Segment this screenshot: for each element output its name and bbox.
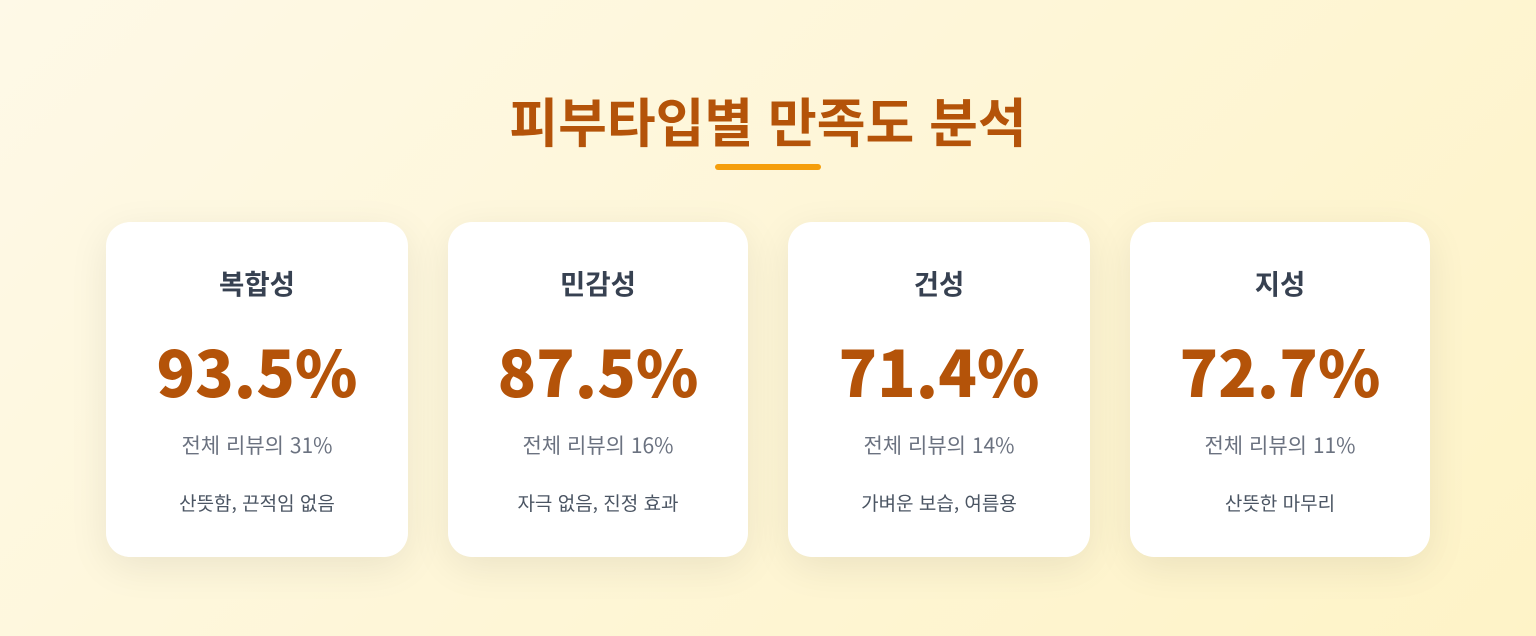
keywords: 산뜻한 마무리 xyxy=(1225,489,1335,516)
keywords: 산뜻함, 끈적임 없음 xyxy=(179,489,335,516)
panel: 건성 card xyxy=(788,222,1090,557)
skin type name: 복합성 xyxy=(219,262,295,302)
title underline xyxy=(715,164,821,170)
satisfaction percentage: 71.4% xyxy=(838,324,1040,416)
panel: 민감성 card xyxy=(448,222,748,557)
review share: 전체 리뷰의 11% xyxy=(1204,430,1356,460)
skin type name: 지성 xyxy=(1255,262,1305,302)
skin type name: 민감성 xyxy=(560,262,636,302)
title: 피부타입별 만족도 분석 xyxy=(509,82,1027,158)
satisfaction percentage: 87.5% xyxy=(497,324,699,416)
review share: 전체 리뷰의 16% xyxy=(522,430,674,460)
skin type name: 건성 xyxy=(914,262,964,302)
satisfaction percentage: 93.5% xyxy=(156,324,358,416)
satisfaction percentage: 72.7% xyxy=(1179,324,1381,416)
keywords: 가벼운 보습, 여름용 xyxy=(861,489,1017,516)
review share: 전체 리뷰의 31% xyxy=(181,430,332,460)
panel: 지성 card xyxy=(1130,222,1430,557)
panel: 복합성 card xyxy=(106,222,408,557)
keywords: 자극 없음, 진정 효과 xyxy=(517,489,679,516)
review share: 전체 리뷰의 14% xyxy=(863,430,1014,460)
